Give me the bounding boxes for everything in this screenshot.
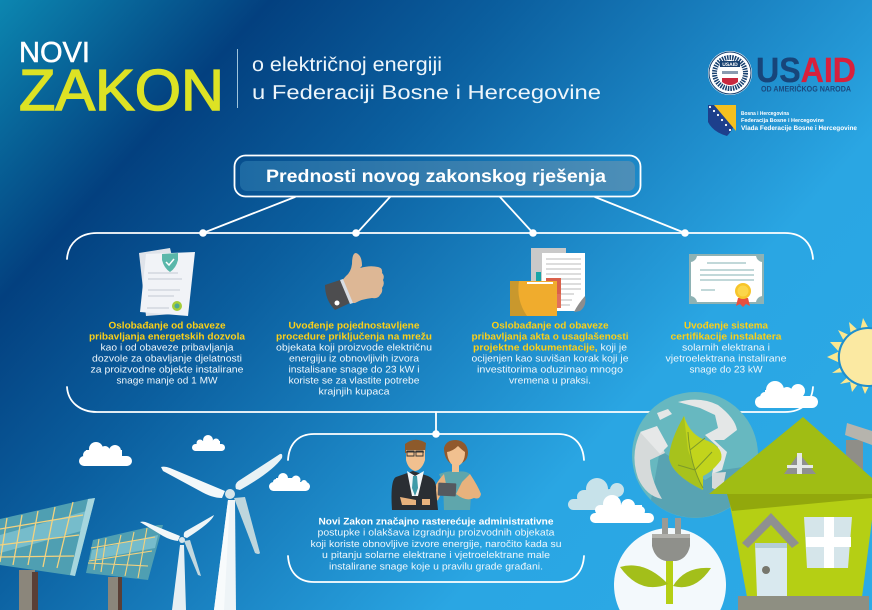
title box: Prednosti novog zakonskog rješenja <box>266 166 607 186</box>
clouds <box>79 435 310 491</box>
text: permit exemption <box>89 320 246 386</box>
icon: certificate <box>689 254 764 307</box>
cloud behind plug <box>568 478 654 523</box>
logo: USAID: USAID <box>756 51 856 90</box>
header subtitle: u Federaciji Bosne i Hercegovine <box>252 82 601 104</box>
text: simplified grid connection: energiju iz obnovljivih izvora <box>289 354 420 364</box>
logo: USAID: USAID <box>722 62 738 68</box>
icon: permit document with shield <box>139 248 195 316</box>
logo: USAID: OD AMERIČKOG NARODA <box>761 84 851 94</box>
text: project documentation exemption: projektne dokumentacije, koji je <box>473 342 627 354</box>
illustration: sun <box>827 318 872 394</box>
illustration: wind turbines <box>140 454 282 610</box>
cloud near sun <box>755 381 818 408</box>
header subtitle: o električnoj energiji <box>252 54 442 76</box>
text: summary: Novi Zakon značajno rasterećuje administrativne <box>318 516 554 528</box>
logo: Federation of Bosnia and Herzegovina: Vlada Federacije Bosne i Hercegovine <box>741 125 857 132</box>
logo: USAID <box>708 51 856 95</box>
panel: advantages bracket <box>67 229 813 412</box>
text: simplified grid connection: procedure priključenja na mrežu <box>276 332 432 342</box>
header subtitle <box>252 54 601 104</box>
icon: green leaf <box>669 416 721 490</box>
text: project documentation exemption: investitorima oduzimao mnogo <box>477 364 623 376</box>
logo: Novi Zakon: NOVI <box>19 37 90 69</box>
text: summary: instalirane snage koje u pravilu grade građani. <box>329 562 543 572</box>
text: installer certification: vjetroelektrana instalirane <box>666 354 786 364</box>
text: summary: koji koriste obnovljive izvore energije, naročito kada su <box>310 539 562 550</box>
text: simplified grid connection: instalisane snage do 23 kW i <box>288 364 420 376</box>
text: project documentation exemption: ocijenjen kao suvišan korak koji je <box>472 354 628 364</box>
text: permit exemption: Oslobađanje od obaveze <box>108 320 226 332</box>
logo: Novi Zakon: ZAKON <box>19 58 224 123</box>
text: permit exemption: snage manje od 1 MW <box>116 376 218 386</box>
text: permit exemption: dozvole za obavljanje djelatnosti <box>92 354 242 364</box>
logo: Federation of Bosnia and Herzegovina: Bosna i Hercegovina <box>741 111 790 117</box>
text: permit exemption: kao i od obaveze pribavljanja <box>100 342 234 354</box>
illustration: house <box>709 417 872 610</box>
text: installer certification: certifikacije instalatera <box>670 332 782 342</box>
title box <box>234 156 640 196</box>
text: summary: postupke i olakšava izgradnju proizvodnih objekata <box>318 528 555 538</box>
text: project documentation exemption: Oslobađanje od obaveze <box>492 320 608 332</box>
icon: folder and papers <box>510 248 585 316</box>
logo: Federation of Bosnia and Herzegovina <box>708 105 857 136</box>
panel: summary bracket <box>288 430 584 582</box>
text: simplified grid connection <box>276 320 432 398</box>
illustration: globe <box>632 392 758 518</box>
connectors from title to panel <box>203 197 685 434</box>
text: summary: u pitanju solarne elektrane i vjetroelektrane male <box>322 550 550 561</box>
text: permit exemption: za proizvodne objekte instalirane <box>90 364 244 376</box>
text: installer certification: solarnih elektrana i <box>682 342 770 354</box>
icon: man and woman <box>392 440 481 510</box>
text: simplified grid connection: krajnjih kupaca <box>318 386 390 398</box>
text: installer certification: snage do 23 kW <box>690 364 763 376</box>
illustration: solar panels <box>0 498 163 610</box>
text: project documentation exemption: pribavljanja akta o usaglašenosti <box>472 332 628 342</box>
text: simplified grid connection: objekata koji proizvode električnu <box>276 342 432 354</box>
illustration: plug with leaves <box>614 518 726 610</box>
text: simplified grid connection: Uvođenje pojednostavljene <box>288 320 420 332</box>
text: installer certification: Uvođenje sistema <box>684 320 769 332</box>
text: simplified grid connection: koriste se za vlastite potrebe <box>288 376 420 386</box>
text: installer certification <box>666 320 786 376</box>
logo: Federation of Bosnia and Herzegovina: Federacija Bosne i Hercegovine <box>741 118 824 124</box>
text: project documentation exemption <box>472 320 628 386</box>
text: summary <box>310 516 562 572</box>
icon: thumbs up <box>325 253 384 310</box>
text: project documentation exemption: vremena u praksi. <box>509 376 591 386</box>
text: permit exemption: pribavljanja energetskih dozvola <box>89 332 246 342</box>
